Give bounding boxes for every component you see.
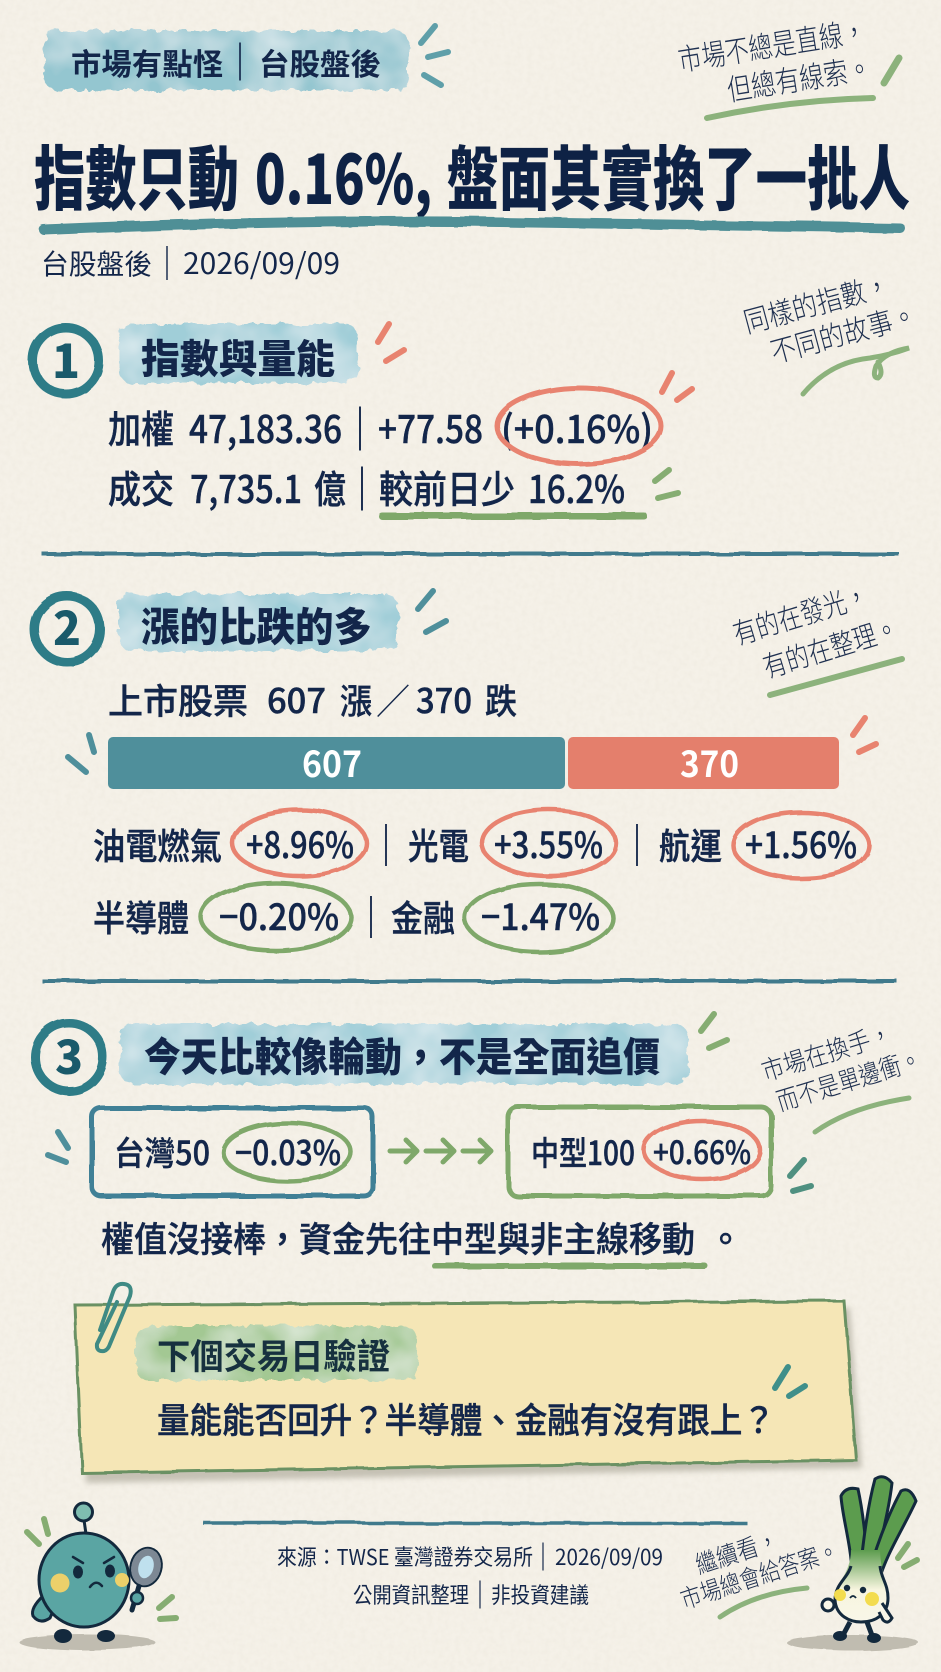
rotation summary sentence: 權值沒接棒，資金先往中型與非主線移動 — [101, 1212, 695, 1263]
index row: (+0.16%) — [501, 399, 653, 454]
volume row: 7,735.1 — [190, 459, 302, 514]
box: Mid-cap 100: +0.66% — [653, 1128, 751, 1174]
accent ticks: onion — [898, 1544, 917, 1567]
box: Taiwan 50 — [92, 1108, 373, 1196]
handwritten note: shining and consolidating — [727, 573, 904, 695]
advancers and decliners row: 上市股票 — [108, 674, 248, 725]
handwritten note: same index: 同樣的指數， — [738, 262, 894, 342]
divider — [42, 979, 897, 983]
index row: +77.58 — [378, 399, 483, 454]
red circle highlight +0.16% — [497, 388, 661, 464]
card paper — [75, 1301, 856, 1473]
handwritten note: top right — [675, 7, 899, 118]
sector losers row — [93, 883, 613, 952]
section number 3: 3 — [55, 1022, 83, 1088]
subtitle date: 台股盤後 — [41, 243, 152, 283]
accent ticks: card — [775, 1367, 805, 1396]
footer source text: ｜ — [529, 1536, 557, 1576]
stacked bar 607 vs 370: 370 — [680, 736, 739, 788]
accent ticks: Taiwan 50 box — [48, 1132, 68, 1162]
footer source text: 來源：TWSE 臺灣證券交易所 — [277, 1540, 533, 1572]
header tag pill: 台股盤後 — [259, 40, 381, 84]
footer divider — [203, 1521, 747, 1525]
accent ticks: section 2 heading — [418, 591, 446, 632]
handwritten note: shining and consolidating: 有的在整理。 — [757, 606, 904, 687]
advancers and decliners row: 漲 — [340, 674, 372, 725]
subtitle date: 2026/09/09 — [183, 241, 340, 283]
sector gainers row — [93, 810, 869, 878]
volume row: 億 — [314, 459, 346, 514]
handwritten note: shining and consolidating: 有的在發光， — [727, 573, 874, 654]
handwritten note: market changes hands: 市場在換手， — [757, 1014, 896, 1089]
header tag pill — [44, 31, 409, 90]
accent ticks: section 3 heading — [701, 1014, 727, 1048]
section number 1 — [33, 326, 99, 394]
accent ticks: Mid-cap box — [790, 1160, 811, 1191]
header tag pill: 市場有點怪 — [71, 40, 223, 84]
handwritten note: keep watching: 市場總會給答案。 — [675, 1531, 843, 1617]
main title: 0.16%, — [255, 125, 432, 224]
section 2 heading pill: 漲的比跌的多 — [141, 595, 372, 653]
icon: paperclip — [97, 1284, 131, 1351]
advancers and decliners row: 跌 — [485, 674, 517, 725]
accent ticks: volume — [655, 470, 678, 498]
panel: next trading day note card — [75, 1284, 862, 1483]
section number 1: 1 — [52, 326, 80, 392]
sector gainers row: +1.56% — [745, 817, 857, 869]
sector gainers row: +8.96% — [246, 817, 354, 869]
sector losers row: ｜ — [350, 885, 392, 946]
handwritten note: keep watching: 繼續看， — [690, 1521, 783, 1582]
sector losers row: −0.20% — [219, 889, 339, 941]
sector gainers row: 航運 — [659, 818, 722, 870]
footer source text — [277, 1536, 663, 1614]
rotation summary sentence: 。 — [708, 1212, 743, 1263]
index row: ｜ — [338, 394, 382, 458]
volume row: 較前日少 — [379, 459, 515, 514]
accent ticks: bar right — [853, 718, 876, 752]
section 3 heading pill: 今天比較像輪動，不是全面追價 — [144, 1025, 660, 1083]
mascot: green onion character — [787, 1477, 919, 1651]
accent ticks: mascot — [27, 1519, 176, 1619]
box: Mid-cap 100: 中型100 — [531, 1127, 635, 1175]
sector gainers row: ｜ — [616, 813, 658, 874]
index row — [108, 394, 653, 458]
sector gainers row: +3.55% — [494, 817, 603, 869]
volume row: ｜ — [340, 454, 384, 518]
handwritten note: market changes hands — [757, 1014, 926, 1132]
sector losers row: 半導體 — [93, 890, 189, 942]
main title — [34, 124, 910, 225]
green underline: mid-cap and non-mainstream — [435, 1263, 705, 1269]
section number 2 — [34, 593, 100, 662]
accent ticks: section 1 heading — [378, 324, 404, 361]
volume row: 成交 — [108, 459, 174, 514]
sector gainers row: 光電 — [408, 818, 469, 870]
arrows: rotation direction — [390, 1140, 491, 1162]
index row: 47,183.36 — [189, 399, 342, 454]
sector losers row: −1.47% — [481, 889, 600, 941]
advancers and decliners row: 607 — [267, 674, 326, 723]
stacked bar 607 vs 370 — [108, 736, 839, 789]
box: Taiwan 50: 台灣50 — [114, 1127, 210, 1175]
handwritten note: same index: 不同的故事。 — [765, 292, 921, 372]
handwritten note: top right: 市場不總是直線， — [675, 7, 869, 80]
panel: section 1 index and volume — [33, 262, 921, 518]
footer source text: ｜ — [466, 1574, 494, 1614]
divider — [42, 552, 899, 556]
mascot: round teal character with magnifier — [19, 1503, 166, 1650]
footer source text: 公開資訊整理 — [353, 1578, 469, 1610]
volume row — [108, 454, 625, 518]
section 1 heading pill: 指數與量能 — [141, 327, 335, 385]
sector gainers row: ｜ — [365, 813, 407, 874]
section number 3 — [35, 1022, 103, 1091]
subtitle date — [41, 237, 340, 286]
section number 2: 2 — [53, 593, 81, 659]
advancers and decliners row — [108, 674, 517, 725]
title underline brush stroke — [44, 221, 900, 230]
stacked bar 607 vs 370: 607 — [302, 736, 362, 788]
panel: section 3 rotation — [35, 1014, 926, 1266]
index row: 加權 — [108, 399, 174, 454]
footer source text: 2026/09/09 — [555, 1540, 663, 1572]
card heading pill: 下個交易日驗證 — [157, 1329, 390, 1380]
accent ticks: +0.16% — [662, 373, 692, 400]
card question text: 量能能否回升？半導體、金融有沒有跟上？ — [157, 1393, 775, 1444]
sector losers row: 金融 — [391, 890, 455, 942]
green underline -16.2% — [382, 512, 644, 520]
accent ticks: bar left — [68, 735, 94, 772]
volume row: 16.2% — [528, 459, 625, 514]
main title: 指數只動 — [34, 124, 239, 225]
panel: section 2 breadth — [34, 573, 904, 952]
advancers and decliners row: 370 — [416, 674, 472, 723]
card shadow — [80, 1308, 862, 1483]
handwritten note: top right: 但總有線索。 — [724, 44, 875, 110]
sector gainers row: 油電燃氣 — [93, 818, 222, 870]
box: Taiwan 50: −0.03% — [235, 1126, 341, 1175]
handwritten note: same index — [738, 262, 921, 394]
header tag pill: ｜ — [221, 32, 259, 87]
subtitle date: ｜ — [150, 237, 184, 286]
advancers and decliners row: ／ — [376, 674, 410, 725]
box: Mid-cap 100 — [508, 1107, 771, 1196]
accent ticks: header pill — [421, 26, 448, 85]
footer source text: 非投資建議 — [491, 1578, 589, 1610]
